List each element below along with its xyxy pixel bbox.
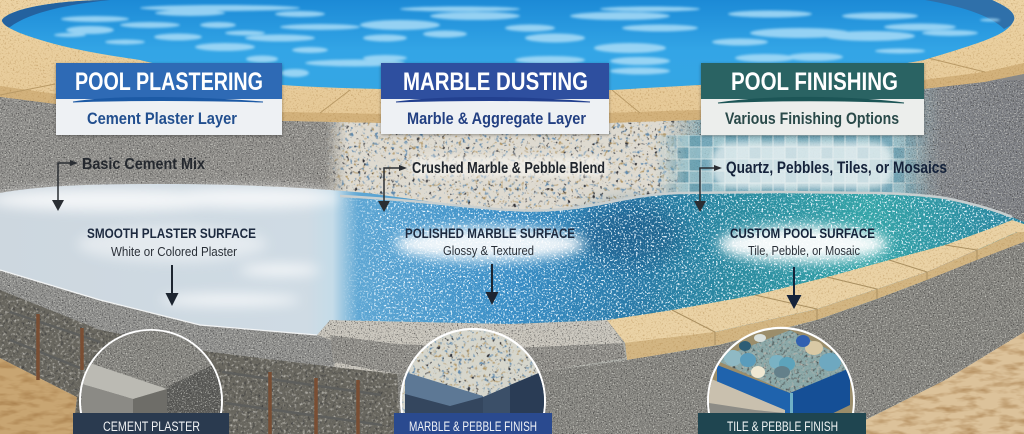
- label: polished marble surface: POLISHED MARBLE SURFACE: [405, 225, 575, 241]
- subheading: Marble & Aggregate Layer: [407, 109, 586, 128]
- pebble wall band: [325, 118, 700, 213]
- badge: marble and pebble finish: MARBLE & PEBBLE FINISH: [409, 419, 537, 434]
- concrete rim: [0, 270, 625, 374]
- label: custom pool surface: Tile, Pebble, or Mosaic: [748, 243, 860, 258]
- callout: quartz, pebbles, tiles: Quartz, Pebbles, Tiles, or Mosaics: [726, 158, 947, 177]
- label: smooth plaster surface: [77, 225, 267, 306]
- rebar: [10, 312, 382, 434]
- arrow: [52, 160, 78, 211]
- floor rim highlight: [340, 192, 1012, 217]
- badge: tile and pebble finish: TILE & PEBBLE FINISH: [727, 419, 838, 434]
- tile band left: [2, 0, 109, 28]
- dark teal depth: [575, 205, 685, 265]
- inset: tile and pebble sample: [707, 326, 855, 413]
- heading: POOL FINISHING: [731, 68, 898, 96]
- panel: pool plastering: [56, 63, 282, 135]
- plaster sheen: [0, 188, 340, 306]
- arrow: [378, 165, 407, 212]
- callout: crushed marble: Crushed Marble & Pebble Blend: [412, 160, 605, 177]
- arrow: [694, 165, 722, 212]
- badge: marble and pebble finish: [394, 413, 552, 434]
- pool floor: plaster to marble to custom surface: [0, 184, 1024, 335]
- label: custom pool surface: CUSTOM POOL SURFACE: [730, 225, 875, 241]
- surface sparkle: [338, 192, 1024, 324]
- inset: marble and pebble sample: [400, 328, 546, 413]
- badge: cement plaster: CEMENT PLASTER: [103, 419, 200, 434]
- callout: basic cement mix: [52, 156, 205, 211]
- panel: marble dusting: [381, 63, 609, 134]
- lower right wall: [397, 242, 1024, 434]
- mosaic tile band: [658, 135, 926, 194]
- callout: quartz, pebbles, tiles: [694, 158, 947, 212]
- arrow: [486, 264, 498, 305]
- heading: POOL PLASTERING: [75, 68, 263, 96]
- label: polished marble surface: [395, 225, 585, 305]
- pebbles: [724, 334, 841, 378]
- label: smooth plaster surface: White or Colored Plaster: [111, 244, 238, 259]
- callout: crushed marble: [378, 157, 608, 212]
- callout: basic cement mix: Basic Cement Mix: [82, 156, 205, 173]
- heading: MARBLE DUSTING: [403, 68, 588, 96]
- badge: cement plaster: [73, 413, 229, 434]
- label: custom pool surface: [718, 225, 888, 262]
- panel: pool finishing: [701, 63, 924, 135]
- arrow: custom pool surface: [786, 267, 802, 309]
- label: polished marble surface: Glossy & Textured: [443, 243, 534, 258]
- label: smooth plaster surface: SMOOTH PLASTER SURFACE: [87, 225, 256, 241]
- badge: tile and pebble finish: [698, 413, 866, 434]
- cement and rebar base: [0, 285, 400, 434]
- tile band right: [925, 0, 1020, 29]
- sand: left and right ground: [0, 332, 1024, 434]
- inset: cement plaster sample: [79, 329, 223, 413]
- coping: front right edge: [607, 220, 1024, 360]
- top coping: pool deck: [0, 0, 1024, 123]
- arrow: [166, 265, 178, 306]
- subheading: Various Finishing Options: [725, 109, 899, 128]
- ripples: [54, 5, 1000, 77]
- subheading: Cement Plaster Layer: [87, 109, 237, 128]
- pool water: [0, 0, 1024, 92]
